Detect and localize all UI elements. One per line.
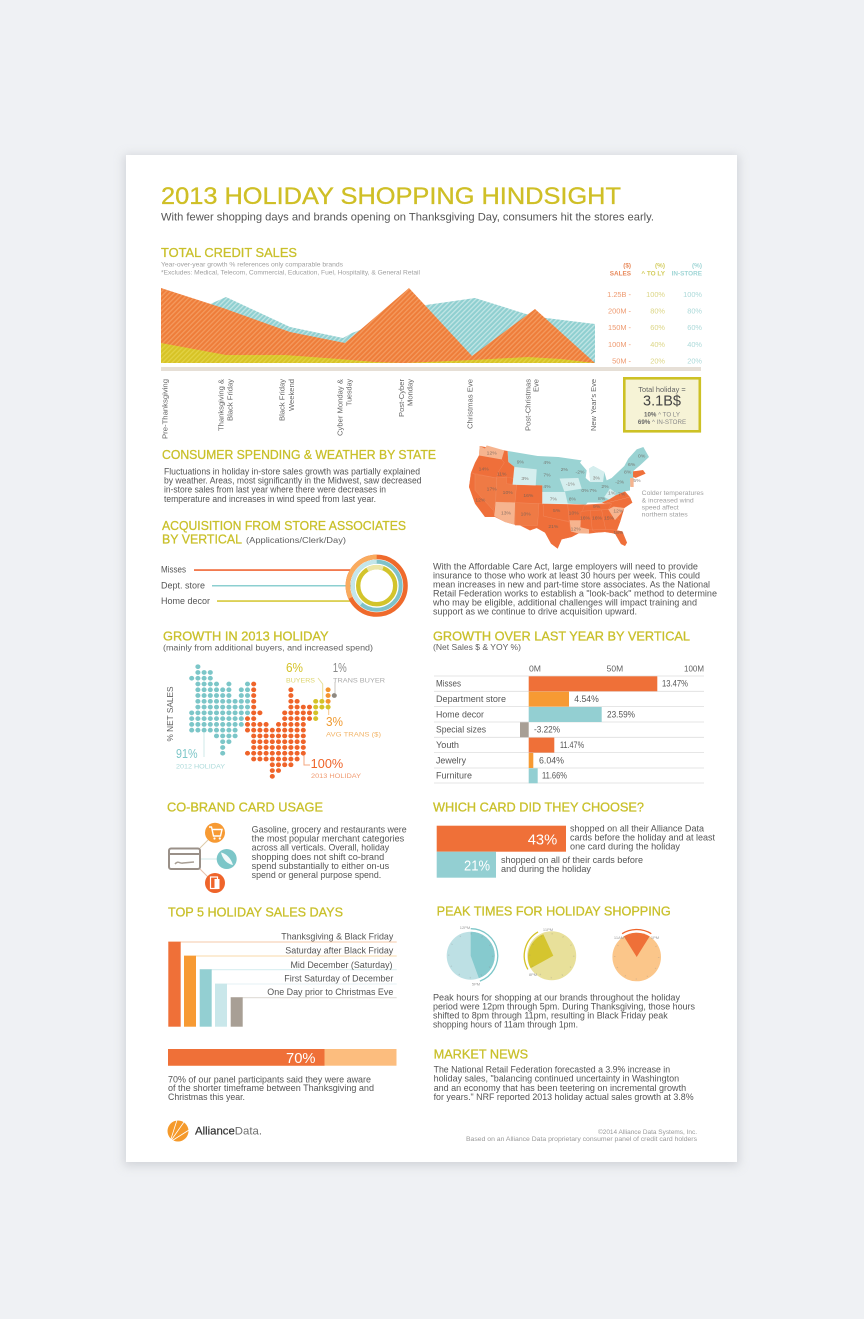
US map: 16% [592, 515, 603, 521]
body text: co-brand: the most popular merchant categories [252, 834, 405, 844]
axis labels: 50M [607, 665, 624, 674]
scale columns: (%) [655, 262, 665, 270]
body text: weather: temperature and increases in wind speed from last year. [164, 494, 376, 504]
text: 21% description [501, 855, 643, 874]
scale columns: 20% [650, 356, 665, 366]
rotated date labels: Black Friday [226, 379, 234, 421]
ring chart legend: Misses [161, 564, 187, 574]
callout: 3% avg trans: 3% [326, 715, 343, 729]
stepped bar chart: Saturday after Black Friday [285, 946, 394, 956]
scale columns: 20% [687, 356, 702, 366]
bar chart: Special sizes [436, 725, 487, 735]
US map: 0% [581, 488, 589, 494]
icon: document [205, 873, 225, 893]
body text: affordable care act: mean increases in new and part-time store associates. As the National [433, 579, 710, 589]
body text: co-brand: across all verticals. Overall, holiday [252, 843, 390, 853]
title: 2013 HOLIDAY SHOPPING HINDSIGHT [161, 183, 621, 210]
US map: 15% [604, 515, 615, 521]
map caption: speed affect [642, 504, 679, 512]
bar chart: Department store [436, 694, 506, 704]
callout: total holiday: 69% ^ IN-STORE [638, 419, 686, 426]
panel: 70 percent awareness [168, 1049, 396, 1102]
subheading: (Net Sales $ & YOY %) [433, 643, 521, 652]
callout: 3% avg trans: AVG TRANS ($) [326, 732, 381, 739]
heading: co-brand: CO-BRAND CARD USAGE [167, 801, 323, 815]
map caption: northern states [642, 512, 688, 518]
icon: shopping cart [205, 823, 225, 843]
panel: market news [434, 1047, 694, 1102]
body text: awareness: Christmas this year. [168, 1092, 245, 1102]
callout: 91% 2012 holiday [176, 747, 226, 770]
panel: acquisition from store associates [161, 518, 717, 616]
US map: 7% [550, 497, 557, 503]
note text: *Excludes: Medical, Telecom, Commercial, Education, Fuel, Hospitality, & General Retail [161, 270, 420, 276]
US map: -2% [576, 470, 585, 476]
US map: 8% [624, 469, 632, 475]
rotated date labels: Post-Christmas [524, 379, 532, 431]
US map: 7% [618, 491, 626, 497]
heading: acquisition: BY VERTICAL [162, 531, 242, 546]
bar chart: 13.47% [662, 679, 688, 689]
text: 43% description: one card during the holiday [570, 842, 681, 852]
axis label: % NET SALES [166, 686, 175, 742]
callout: total holiday: 10% ^ TO LY [644, 411, 680, 418]
axis labels [529, 665, 704, 674]
callout: 1% trans buyer: TRANS BUYER [333, 677, 385, 684]
callout: total holiday: 3.1B$ [643, 394, 681, 410]
panel: which card did they choose [433, 801, 716, 878]
scale columns: 40% [687, 340, 702, 349]
body text: peak times [433, 993, 696, 1030]
US map: 1% [608, 490, 616, 496]
rotated date labels: Christmas Eve [466, 379, 474, 429]
text: 21% description: shopped on all of their cards before [501, 855, 643, 865]
US map: 5% [553, 508, 561, 514]
body text: co-brand: spend substantially to either on-us [252, 861, 390, 871]
body text: market news: for years." NRF reported 2013 holiday actual sales growth at 3.8% [434, 1092, 694, 1102]
callout: 1% trans buyer: 1% [333, 661, 347, 675]
panel: peak times for holiday shopping [433, 905, 696, 1030]
text: 43% description [570, 824, 716, 852]
US map: 11% [497, 471, 507, 477]
US map: 2% [561, 467, 568, 473]
US map [469, 445, 649, 549]
US map: 21% [548, 524, 559, 530]
clock: black friday [612, 930, 661, 981]
area chart [161, 288, 595, 363]
rotated date labels: Thanksgiving & [216, 379, 226, 431]
body text: affordable care act: insurance to those who work at least 30 hours per week. This could [433, 570, 700, 580]
callout: 6% buyers: BUYERS [286, 677, 315, 684]
poster panel [126, 155, 737, 1162]
US map: 7% [589, 488, 597, 494]
panel: growth in 2013 holiday [163, 630, 385, 780]
bar chart: 6.04% [539, 755, 564, 765]
scale columns: 50M - [612, 356, 632, 366]
US map: 9% [517, 460, 524, 466]
body text: awareness: 70% of our panel participants said they were aware [168, 1074, 371, 1084]
US map: 16% [580, 515, 591, 521]
body text: affordable care act: Retail Federation works to establish a "look-back" method to determine [433, 588, 717, 598]
US map: 8% [598, 496, 606, 502]
axis labels: 0M [529, 665, 541, 674]
stepped bar chart [168, 931, 397, 1027]
body text: affordable care act: who may be eligible, additional challenges will impact training and [432, 597, 697, 607]
body text: affordable care act: support as we continue to drive acquisition upward. [433, 606, 637, 616]
map caption: Colder temperatures [642, 490, 704, 497]
callout: 6% buyers: 6% [286, 661, 303, 675]
body text: market news [434, 1065, 694, 1102]
body text: weather [164, 467, 422, 504]
scale columns: 60% [687, 323, 702, 332]
map caption [642, 490, 704, 518]
body text: awareness [168, 1074, 374, 1102]
rotated date labels: Monday [406, 379, 414, 406]
clock: all holiday [447, 925, 498, 986]
panel: growth over last year by vertical [433, 630, 704, 783]
stepped bar chart: First Saturday of December [284, 974, 393, 984]
text: 43% description: cards before the holiday and at least [570, 833, 716, 843]
dot chart [192, 667, 334, 776]
bar chart: 23.59% [607, 709, 635, 719]
stepped bar chart: Thanksgiving & Black Friday [281, 931, 394, 941]
US map: 16% [523, 493, 534, 499]
text: 21% description: and during the holiday [501, 864, 592, 874]
callout: 100% 2013 holiday [311, 757, 362, 780]
axis bar [161, 367, 701, 371]
body text: affordable care act [432, 561, 717, 616]
US map: 10% [569, 511, 579, 517]
rotated date labels [160, 379, 598, 439]
rotated date labels: Post-Cyber [397, 379, 406, 417]
footer credits: Based on an Alliance Data proprietary consumer panel of credit card holders [466, 1136, 697, 1143]
US map: 12% [487, 451, 497, 457]
body text: market news: The National Retail Federation forecasted a 3.9% increase in [434, 1065, 670, 1075]
rotated date labels: Tuesday [344, 379, 354, 406]
scale columns: IN-STORE [672, 270, 703, 278]
progress bar: 70%: 70% [286, 1051, 316, 1067]
scale columns: 80% [687, 306, 702, 316]
bar chart: -3.22% [534, 725, 560, 735]
logo: Alliance Data [168, 1120, 262, 1142]
US map: 12% [475, 497, 486, 503]
body text: peak times: period were 12pm through 5pm. During Thanksgiving, those hours [433, 1002, 696, 1012]
body text: weather: in-store sales from last year where there were decreases in [164, 485, 386, 495]
icon: tag [217, 849, 237, 869]
heading: market news: MARKET NEWS [434, 1047, 528, 1061]
US map: 5% [633, 478, 641, 484]
body text: co-brand: Gasoline, grocery and restaurants were [252, 825, 407, 835]
panel: top 5 holiday sales days [168, 906, 397, 1027]
US map: 13% [501, 510, 512, 516]
callout: 91% 2012 holiday: 91% [176, 747, 198, 761]
US map: 14% [479, 467, 489, 473]
clock: all holiday: 12PM [460, 925, 470, 930]
clock: thanksgiving [524, 927, 576, 980]
scale columns: 200M - [608, 306, 632, 316]
heading: top 5: TOP 5 HOLIDAY SALES DAYS [168, 906, 343, 920]
clock: all holiday: 5PM [472, 982, 480, 986]
progress bar: 70% [168, 1049, 396, 1067]
body text: co-brand: spend or general purpose spend. [252, 870, 381, 880]
callout: 3% avg trans [326, 715, 381, 739]
stepped bar chart: One Day prior to Christmas Eve [267, 987, 393, 997]
callout: 1% trans buyer [333, 661, 385, 684]
axis labels: 100M [684, 665, 704, 674]
body text: peak times: Peak hours for shopping at our brands throughout the holiday [433, 993, 681, 1003]
body text: peak times: shopping hours of 11am through 1pm. [433, 1020, 578, 1030]
heading: growth over last year: GROWTH OVER LAST YEAR BY VERTICAL [433, 630, 690, 644]
body text: awareness: of the shorter timeframe between Thanksgiving and [168, 1083, 374, 1093]
US map: 8% [569, 496, 576, 502]
callout: 91% 2012 holiday: 2012 HOLIDAY [176, 763, 226, 770]
US map: 18% [613, 530, 624, 536]
scale columns: ($) [623, 262, 631, 270]
scale columns: 150M - [608, 323, 632, 332]
scale columns: ^ TO LY [641, 270, 666, 278]
footer credits: ©2014 Alliance Data Systems, Inc. [598, 1129, 697, 1136]
heading: growth: GROWTH IN 2013 HOLIDAY [163, 630, 329, 644]
body text: market news: and an economy that has been teetering on incremental growth [434, 1083, 686, 1093]
text: 43% description: shopped on all their Alliance Data [570, 824, 704, 834]
callout: 100% 2013 holiday: 100% [311, 757, 343, 771]
bar chart: Jewelry [436, 755, 467, 765]
rotated date labels: New Year's Eve [589, 379, 598, 431]
bar: 43%: 43% [528, 831, 557, 848]
rotated date labels: Black Friday [278, 379, 286, 421]
US map: 7% [543, 472, 551, 478]
callout: 100% 2013 holiday: 2013 HOLIDAY [311, 773, 362, 780]
callout: total holiday: Total holiday = [638, 385, 686, 394]
body text: weather: by weather. Areas, most significantly in the Midwest, saw decreased [164, 476, 422, 486]
panel: consumer spending and weather [162, 445, 704, 549]
rotated date labels: Pre-Thanksgiving [160, 379, 170, 439]
rotated date labels: Eve [532, 379, 540, 392]
scale columns: 100M - [608, 340, 632, 349]
scale columns: (%) [692, 262, 702, 270]
bar chart: 4.54% [574, 694, 599, 704]
scale columns [607, 262, 703, 366]
bar chart: Furniture [436, 771, 472, 781]
US map: 0% [638, 453, 646, 459]
US map: 10% [521, 511, 531, 517]
US map: 12% [571, 527, 581, 533]
US map: 12% [613, 509, 624, 515]
clock: thanksgiving: 8PM [529, 972, 537, 977]
callout: 6% buyers [286, 661, 315, 684]
leader lines [204, 678, 335, 765]
scale columns: SALES [610, 270, 632, 278]
ring chart [348, 557, 406, 614]
panel: co-brand card usage [167, 801, 407, 893]
callout: total holiday [624, 378, 700, 431]
US map: -2% [615, 480, 625, 486]
heading: acquisition [162, 518, 406, 546]
US map: 17% [487, 487, 497, 493]
body text: peak times: shifted to 8pm through 11pm, resulting in Black Friday peak [433, 1011, 668, 1021]
heading: which card: WHICH CARD DID THEY CHOOSE? [433, 801, 644, 815]
body text: affordable care act: With the Affordable Care Act, large employers will need to provide [433, 561, 698, 571]
body text: co-brand: shopping does not shift co-brand [252, 852, 384, 862]
map caption: & increased wind [642, 497, 694, 504]
heading: acquisition: ACQUISITION FROM STORE ASSOCIATES [162, 518, 406, 533]
US map: 3% [593, 475, 600, 481]
US map: 3% [521, 476, 529, 482]
note text [161, 262, 420, 276]
clock: black friday: 11AM [614, 935, 624, 940]
ring chart legend: Dept. store [161, 580, 205, 590]
rotated date labels: Cyber Monday & [336, 379, 344, 436]
logo: Alliance Data: AllianceData. [195, 1126, 262, 1138]
clock: black friday: 1PM [651, 935, 659, 940]
US map: 10% [503, 490, 513, 496]
bar chart: Youth [436, 740, 459, 750]
US map: 4% [543, 460, 551, 466]
subtitle: With fewer shopping days and brands opening on Thanksgiving Day, consumers hit the stores early. [161, 212, 654, 224]
body text: market news: holiday sales, "balancing continued uncertainty in Washington [434, 1074, 679, 1084]
icon: credit card [169, 848, 200, 869]
bar chart: Misses [436, 679, 462, 689]
body text: co-brand [252, 825, 407, 880]
bar: 21%: 21% [464, 858, 490, 874]
clock: thanksgiving: 11PM [543, 927, 553, 932]
US map: 4% [543, 484, 551, 490]
scale columns: 80% [650, 306, 665, 316]
heading: peak times: PEAK TIMES FOR HOLIDAY SHOPPING [437, 905, 671, 919]
scale columns: 60% [650, 323, 665, 332]
ring chart legend [161, 564, 354, 606]
bar chart: Home decor [436, 709, 484, 719]
footer credits [466, 1129, 697, 1143]
stepped bar chart: Mid December (Saturday) [290, 960, 393, 970]
heading: consumer spending: CONSUMER SPENDING & WEATHER BY STATE [162, 448, 436, 462]
bar chart: 11.47% [560, 740, 584, 750]
heading: acquisition: (Applications/Clerk/Day) [246, 536, 346, 545]
scale columns: 40% [650, 340, 665, 349]
note text: Year-over-year growth % references only comparable brands [161, 262, 343, 268]
scale columns: 1.25B - [607, 290, 632, 299]
bar chart [436, 676, 688, 783]
US map: 9% [593, 504, 601, 510]
panel: total credit sales [160, 246, 703, 439]
scale columns: 100% [646, 290, 665, 299]
US map: 2% [601, 484, 609, 490]
US map: -1% [566, 481, 575, 487]
bar: 43% [437, 826, 566, 852]
subheading: growth: (mainly from additional buyers, and increased spend) [163, 644, 373, 653]
bar chart: 11.66% [542, 771, 567, 781]
connector lines [200, 840, 217, 877]
scale columns: 100% [683, 290, 702, 299]
body text: weather: Fluctuations in holiday in-store sales growth was partially explained [164, 467, 420, 477]
ring chart legend: Home decor [161, 596, 210, 606]
heading: total credit sales: TOTAL CREDIT SALES [161, 246, 297, 260]
US map: 6% [628, 462, 636, 468]
rotated date labels: Weekend [287, 379, 296, 411]
bar: 21% [437, 852, 496, 878]
